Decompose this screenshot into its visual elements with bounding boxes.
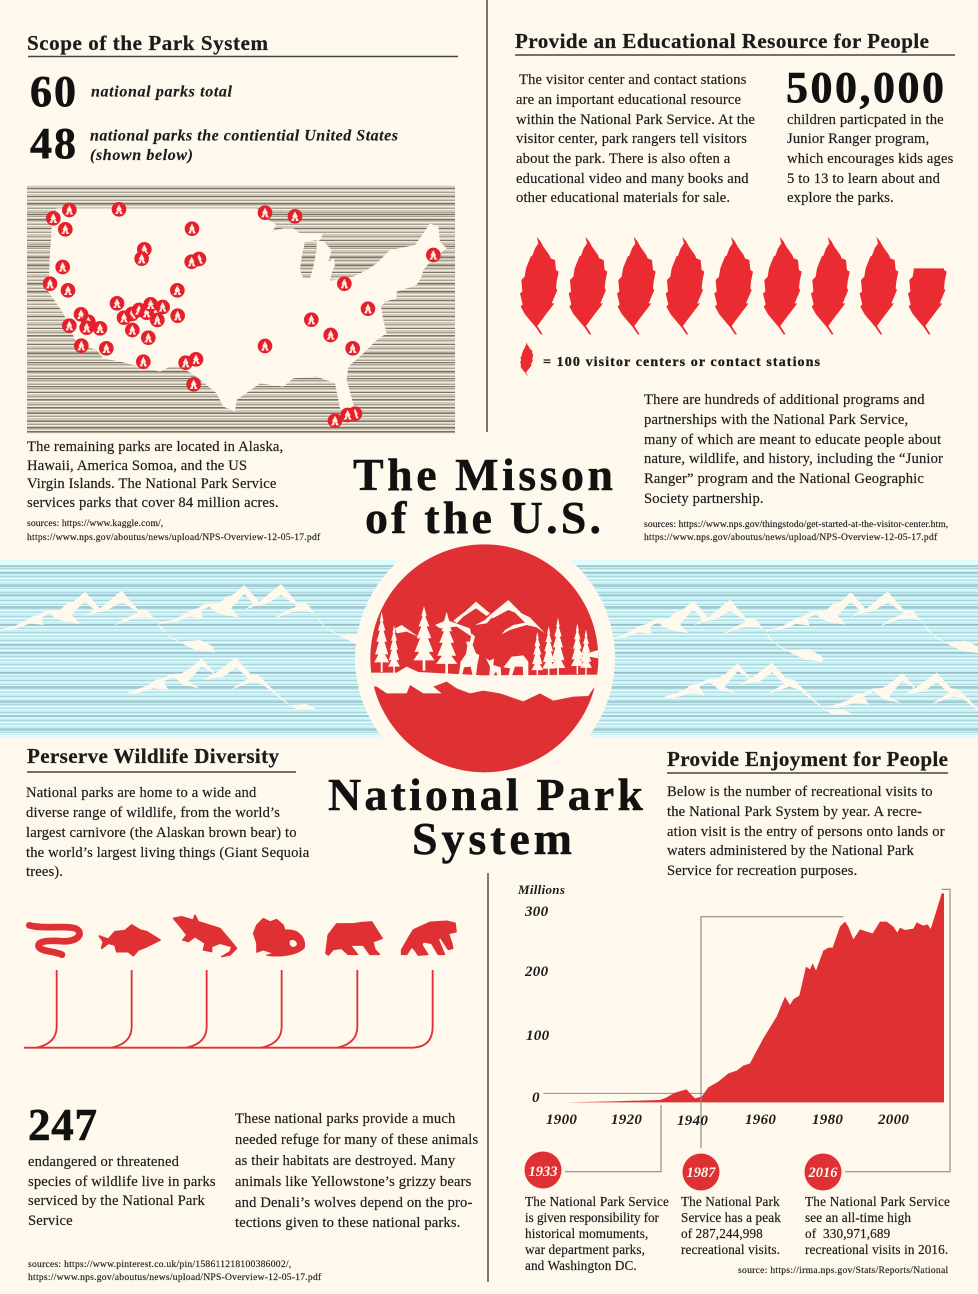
- axis labels: 1900: [546, 1112, 577, 1128]
- stat: 247 species: endangered or threatened: [28, 1154, 180, 1170]
- source: enjoyment: source: https://irma.nps.gov/Stats/Reports/National: [738, 1265, 949, 1276]
- callout: 1933: war department parks,: [525, 1242, 645, 1257]
- text: wildlife intro: largest carnivore (the Alaskan brown bear) to: [26, 825, 297, 841]
- text: wildlife intro: trees).: [26, 864, 63, 880]
- callout: 2016: see an all-time high: [805, 1210, 911, 1225]
- sources: scope: https://www.nps.gov/aboutus/news/upload/NPS-Overview-12-05-17.pdf: [27, 532, 321, 543]
- sources: scope: [27, 518, 321, 543]
- text: refuge: needed refuge for many of these animals: [235, 1132, 478, 1148]
- text: remaining parks: Hawaii, America Somoa, and the US: [27, 458, 247, 474]
- callout: 2016: 2016: [808, 1165, 838, 1181]
- callout: 2016: [804, 1154, 950, 1257]
- band: striped mountains: [0, 560, 978, 738]
- callout: 2016: of 330,971,689: [805, 1226, 891, 1241]
- legend: leaf: = 100 visitor centers or contact stations: [543, 355, 821, 370]
- text: visitor center: The visitor center and contact stations: [519, 72, 747, 88]
- callout: 1987: Service has a peak: [681, 1210, 781, 1225]
- heading: enjoyment: Provide Enjoyment for People: [667, 747, 948, 771]
- text: refuge: [235, 1111, 478, 1231]
- text: wildlife intro: diverse range of wildlife, from the world’s: [26, 805, 280, 821]
- text: enjoyment intro: ation visit is the entry of persons onto lands or: [667, 824, 945, 840]
- text: partnerships: partnerships with the National Park Service,: [644, 412, 908, 428]
- callout: 1987: of 287,244,998: [681, 1226, 763, 1241]
- sources: wildlife: [28, 1259, 322, 1283]
- emblem: red circle with forest scene: [355, 544, 615, 772]
- title: first part: of the U.S.: [365, 492, 601, 543]
- axis labels: 1920: [611, 1112, 642, 1128]
- sources: education: [644, 519, 948, 543]
- sources: scope: sources: https://www.kaggle.com/,: [27, 518, 163, 529]
- axis labels: 100: [526, 1028, 550, 1044]
- text: enjoyment intro: [667, 784, 945, 879]
- text: visitor center: within the National Park Service. At the: [516, 112, 755, 128]
- text: refuge: tections given to these national parks.: [235, 1215, 461, 1231]
- title: first part: [353, 449, 613, 543]
- text: visitor center: about the park. There is also often a: [516, 151, 731, 167]
- text: refuge: as their habitats are destroyed. Many: [235, 1153, 456, 1169]
- panel: enjoyment: [517, 747, 950, 1276]
- text: remaining parks: The remaining parks are located in Alaska,: [27, 439, 283, 455]
- animal silhouettes and connectors: [24, 915, 456, 1048]
- text: partnerships: [644, 392, 943, 507]
- text: partnerships: Ranger” program and the National Geographic: [644, 471, 924, 487]
- sources: wildlife: sources: https://www.pinterest.co.uk/pin/158611218100386002/,: [28, 1259, 291, 1270]
- vertical divider top: [486, 0, 488, 432]
- axis labels: 300: [524, 904, 549, 920]
- callout: 1987: [681, 1154, 781, 1257]
- callout: 2016: The National Park Service: [805, 1194, 950, 1209]
- connector lines: [24, 970, 433, 1048]
- text: wildlife intro: [26, 785, 310, 880]
- stat: 60 national parks: national parks total: [91, 84, 233, 100]
- heading: scope: Scope of the Park System: [27, 31, 268, 55]
- text: partnerships: many of which are meant to educate people about: [644, 432, 941, 448]
- axis labels: 2000: [877, 1112, 909, 1128]
- stat: 247 species: [28, 1100, 216, 1229]
- icon: eel: [29, 925, 80, 955]
- stat: 500,000 children: Junior Ranger program,: [787, 131, 929, 147]
- stat: 247 species: Service: [28, 1213, 73, 1229]
- stat: 500,000 children: explore the parks.: [787, 190, 894, 206]
- axis labels: 200: [524, 964, 549, 980]
- title: second part: System: [412, 813, 572, 864]
- stat: 500,000 children: 500,000: [786, 63, 944, 112]
- stat: 60 national parks: 60: [30, 67, 76, 116]
- text: visitor center: are an important educational resource: [516, 92, 741, 108]
- area chart: recreational visits: [517, 882, 950, 1172]
- stat: 500,000 children: [786, 63, 954, 206]
- text: wildlife intro: National parks are home to a wide and: [26, 785, 257, 801]
- map of national parks: [27, 185, 455, 434]
- text: enjoyment intro: Service for recreation purposes.: [667, 863, 857, 879]
- pictogram: leaves: [520, 237, 947, 334]
- title: first part: The Misson: [353, 449, 613, 500]
- text: enjoyment intro: waters administered by the National Park: [667, 843, 915, 859]
- axis labels: [517, 882, 909, 1129]
- text: remaining parks: services parks that cover 84 million acres.: [27, 495, 279, 511]
- text: visitor center: visitor center, park rangers tell visitors: [516, 131, 747, 147]
- heading: educational resource: Provide an Educational Resource for People: [515, 29, 929, 53]
- text: visitor center: [516, 72, 755, 206]
- text: remaining parks: [27, 439, 283, 511]
- park markers: [43, 202, 441, 428]
- vertical divider bottom: [487, 873, 489, 1282]
- axis labels: Millions: [517, 882, 565, 897]
- text: partnerships: Society partnership.: [644, 491, 764, 507]
- sources: wildlife: https://www.nps.gov/aboutus/news/upload/NPS-Overview-12-05-17.pdf: [28, 1272, 322, 1283]
- stat: 247 species: species of wildlife live in parks: [28, 1174, 216, 1190]
- text: refuge: and Denali’s wolves depend on the pro-: [235, 1195, 473, 1211]
- text: remaining parks: Virgin Islands. The National Park Service: [27, 476, 277, 492]
- callout: 1987: 1987: [686, 1165, 716, 1181]
- callout: 1933: 1933: [528, 1164, 558, 1180]
- stat: 48 national parks: national parks the contiential United States: [90, 128, 398, 144]
- panel: educational resource: [515, 29, 955, 543]
- stat: 247 species: serviced by the National Park: [28, 1193, 206, 1209]
- icon: monkey: [402, 921, 456, 955]
- text: visitor center: other educational materials for sale.: [516, 190, 730, 206]
- icon: lizard: [173, 915, 237, 957]
- stat: 60 national parks: [30, 67, 233, 116]
- callout lines: [565, 889, 950, 1172]
- text: refuge: These national parks provide a much: [235, 1111, 456, 1127]
- icon: bear: [326, 922, 382, 955]
- text: refuge: animals like Yellowstone’s grizzy bears: [235, 1174, 472, 1190]
- text: wildlife intro: the world’s largest living things (Giant Sequoia: [26, 845, 310, 861]
- stat: 247 species: 247: [28, 1100, 97, 1150]
- axis labels: 1940: [677, 1113, 708, 1129]
- panel: wildlife diversity: [24, 744, 478, 1283]
- icon: frilled lizard: [253, 918, 305, 956]
- callout: 1933: is given responsibility for: [525, 1210, 659, 1225]
- stat: 500,000 children: children particpated in the: [787, 112, 944, 128]
- stat: 48 national parks: (shown below): [90, 147, 193, 164]
- text: visitor center: educational video and many books and: [516, 171, 749, 187]
- axis labels: 0: [532, 1090, 540, 1106]
- panel: scope of the park system: [27, 31, 458, 543]
- callout: 1933: and Washington DC.: [525, 1258, 637, 1273]
- text: enjoyment intro: Below is the number of recreational visits to: [667, 784, 933, 800]
- sources: education: sources: https://www.nps.gov/thingstodo/get-started-at-the-visitor-center.htm,: [644, 519, 948, 530]
- stat: 48 national parks: [30, 119, 398, 168]
- text: enjoyment intro: the National Park System by year. A recre-: [667, 804, 922, 820]
- stat: 500,000 children: 5 to 13 to learn about and: [787, 171, 941, 187]
- callout: 2016: recreational visits in 2016.: [805, 1242, 948, 1257]
- callout: 1933: [524, 1152, 669, 1273]
- sources: education: https://www.nps.gov/aboutus/news/upload/NPS-Overview-12-05-17.pdf: [644, 532, 938, 543]
- title: second part: National Park: [328, 769, 643, 820]
- legend: leaf: [520, 342, 821, 376]
- heading: wildlife: Perserve Wildlife Diversity: [27, 744, 280, 768]
- icon: fish: [99, 925, 160, 956]
- text: partnerships: nature, wildlife, and history, including the “Junior: [644, 451, 943, 467]
- callout: 1987: recreational visits.: [681, 1242, 780, 1257]
- callout: 1933: The National Park Service: [525, 1194, 669, 1209]
- stat: 500,000 children: which encourages kids ages: [787, 151, 954, 167]
- callout: 1987: The National Park: [681, 1194, 780, 1209]
- title: second part: [328, 769, 643, 864]
- text: partnerships: There are hundreds of additional programs and: [644, 392, 925, 408]
- callout: 1933: historical momuments,: [525, 1226, 648, 1241]
- axis labels: 1980: [812, 1112, 843, 1128]
- stat: 48 national parks: 48: [30, 119, 76, 168]
- axis labels: 1960: [745, 1112, 776, 1128]
